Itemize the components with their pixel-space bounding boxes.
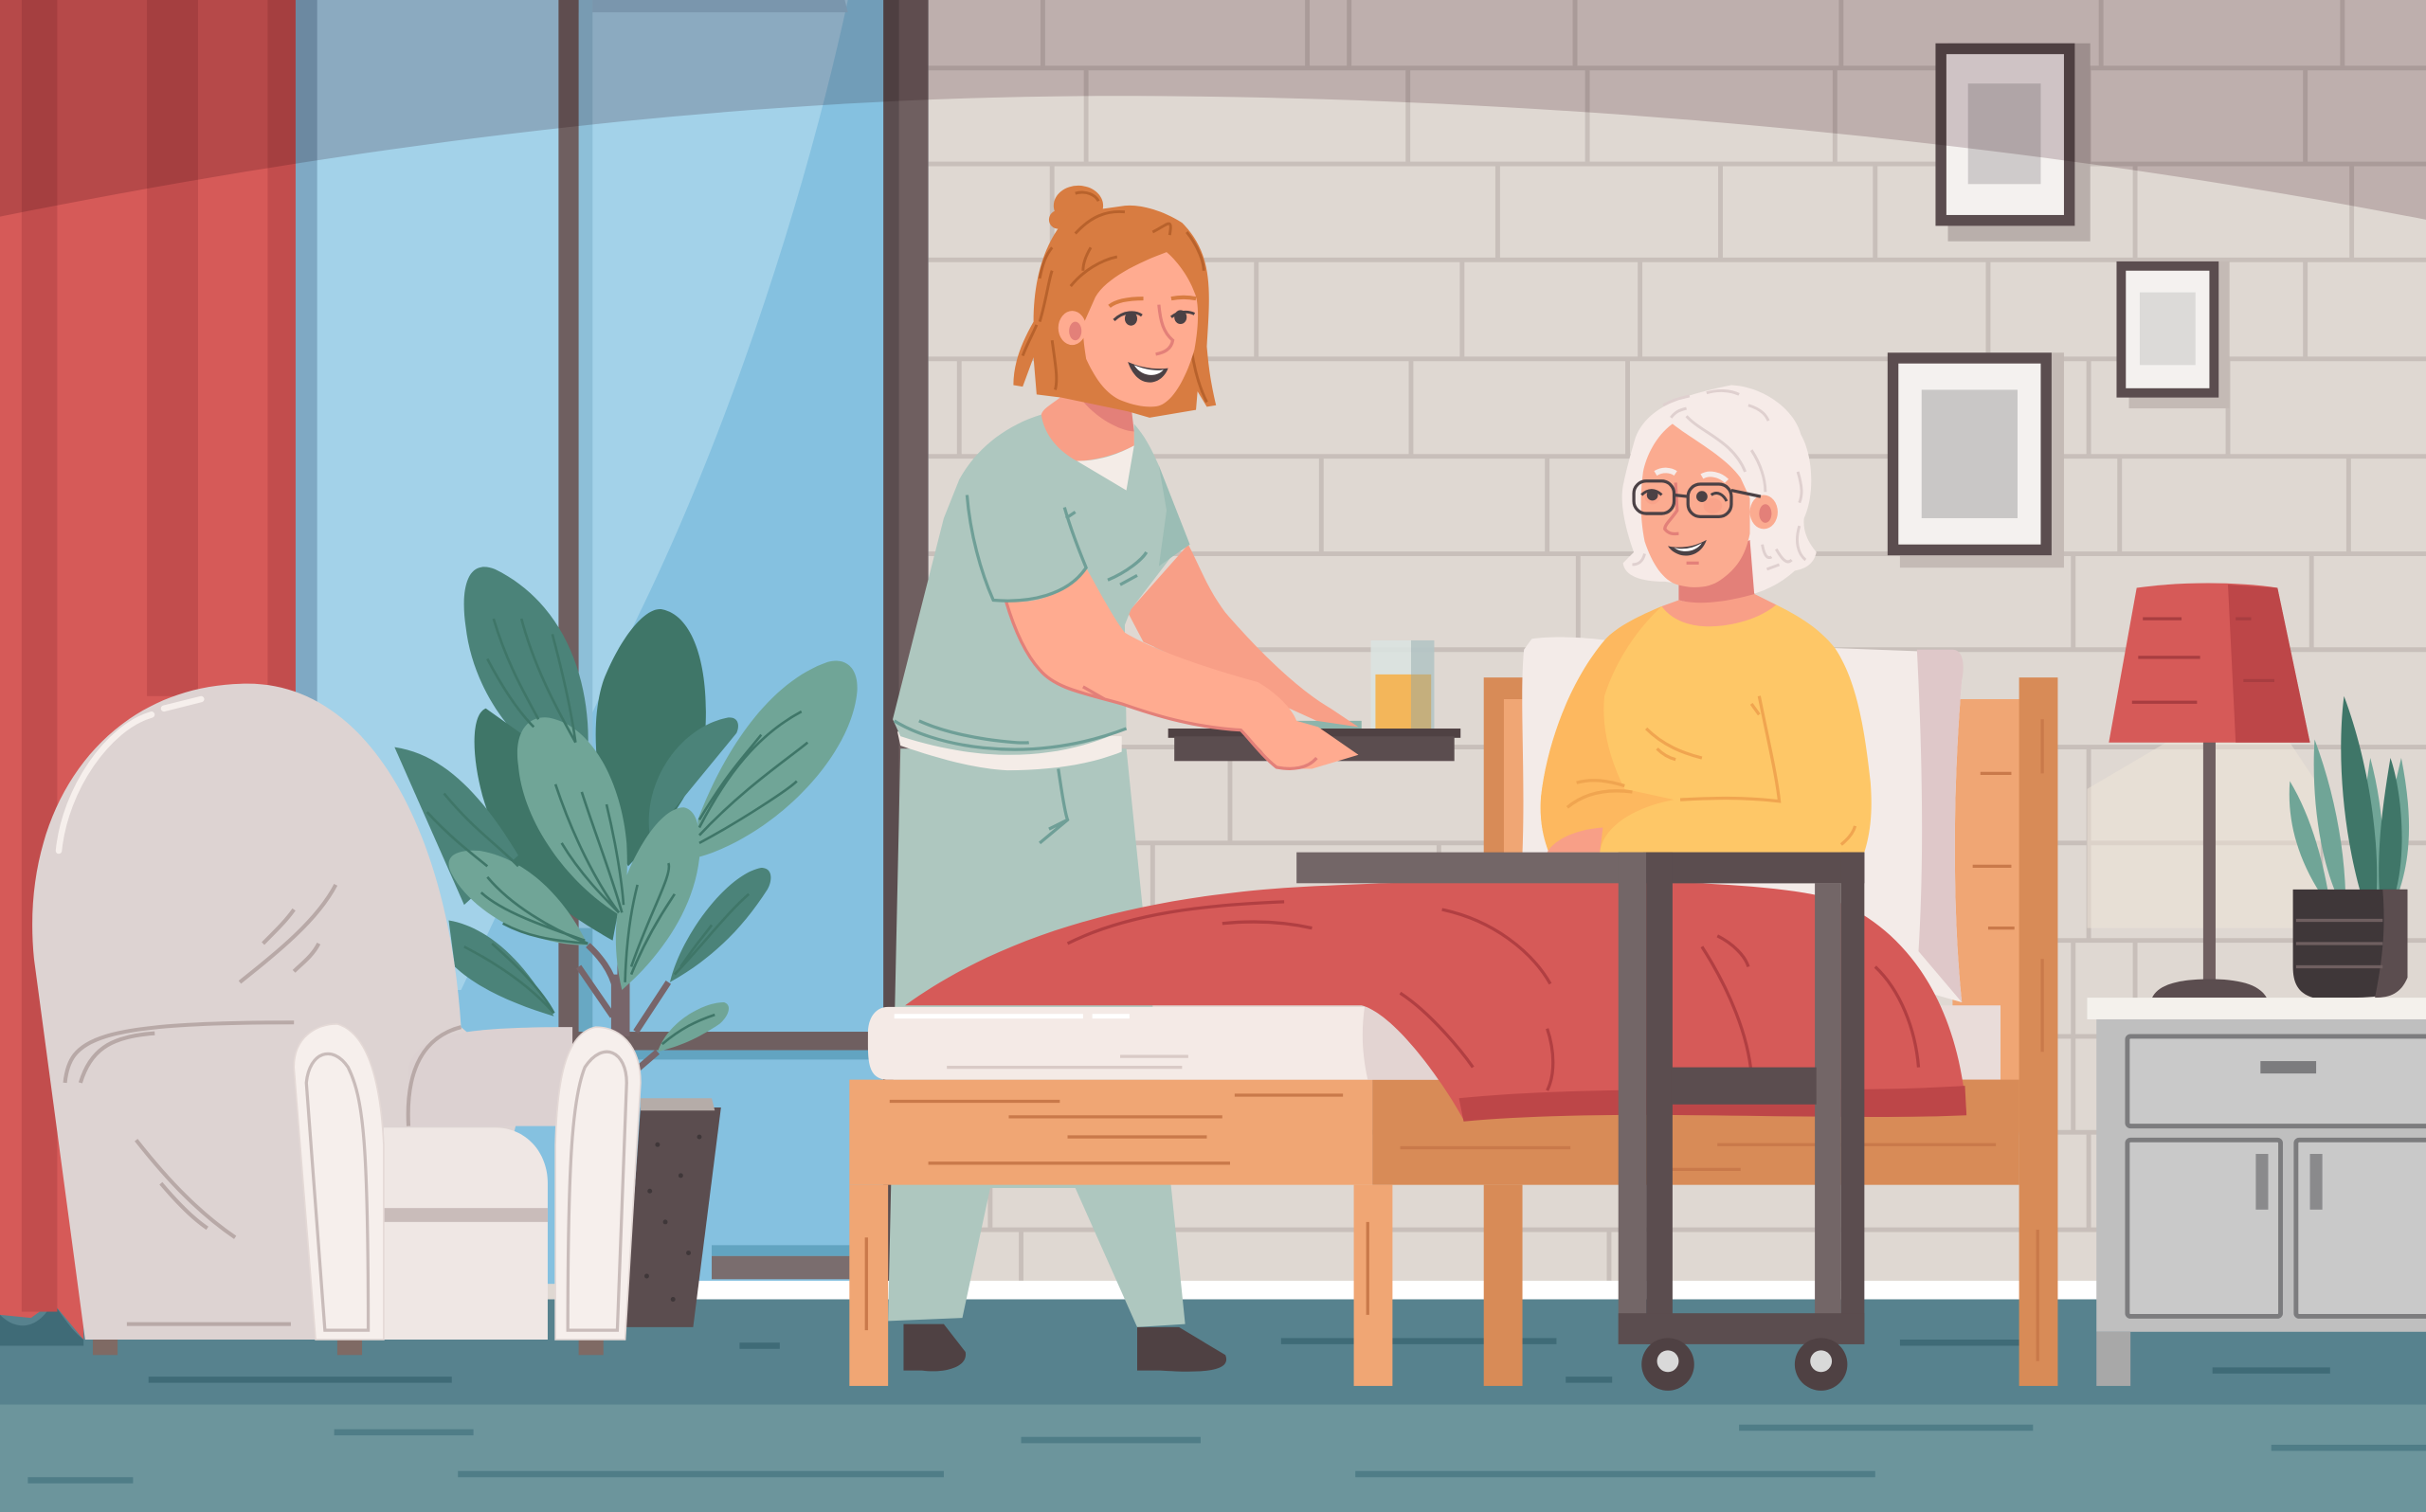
mattress back: [1918, 1005, 2001, 1080]
caregiver legs: [888, 748, 1186, 1327]
woman face: [1641, 423, 1750, 587]
panel: brick wall: [913, 0, 2426, 1299]
panel: bed frame and bedding: [849, 880, 2019, 1386]
icon: tray with glass: [1168, 640, 1460, 761]
panel: bed headboard: [1484, 677, 2057, 1386]
caregiver v-neck: [1077, 445, 1134, 491]
plant leaf veins: [427, 619, 807, 1044]
icon: potted plant: [394, 567, 858, 1327]
pillows: [1522, 638, 1963, 1002]
icon: small potted plant: [2290, 696, 2409, 998]
icon: framed picture small: [2116, 261, 2230, 408]
woman ear: [1750, 495, 1778, 529]
woman sweater: [1541, 604, 1872, 853]
plant stems: [579, 916, 668, 1071]
icon: framed picture large top: [1935, 44, 2091, 242]
icon: overbed table: [1296, 853, 1864, 1391]
caregiver undershirt band: [897, 731, 1122, 770]
panel: curtain: [0, 0, 296, 1345]
caregiver ear: [1059, 311, 1086, 345]
caregiver face: [1083, 252, 1198, 406]
blanket: [905, 880, 1966, 1120]
caregiver near arm: [1005, 567, 1358, 768]
caregiver neck: [1041, 382, 1134, 461]
woman neck: [1678, 580, 1754, 603]
icon: table lamp: [2087, 584, 2321, 998]
panel: baseboard: [680, 1281, 2104, 1299]
woman hair: [1622, 386, 1817, 594]
icon: framed picture middle: [1888, 352, 2064, 567]
panel: floor: [0, 1299, 2426, 1512]
plant pot: [625, 1098, 721, 1327]
caregiver facial features: [1110, 297, 1196, 383]
woman glasses and features: [1634, 471, 1761, 563]
icon: nightstand: [2087, 998, 2426, 1386]
icon: armchair: [32, 684, 641, 1355]
panel: ceiling shadow: [0, 0, 2426, 220]
panel: window: [288, 0, 929, 1284]
caregiver far arm: [1128, 545, 1358, 727]
figure: caregiver: [888, 186, 1358, 1372]
caregiver hair: [1013, 186, 1216, 418]
plant leaves: [394, 567, 858, 1052]
mattress: [868, 1007, 1447, 1080]
caregiver shirt: [893, 415, 1190, 755]
bed rail: [849, 1080, 1372, 1185]
figure: elderly woman: [1522, 386, 1964, 1002]
